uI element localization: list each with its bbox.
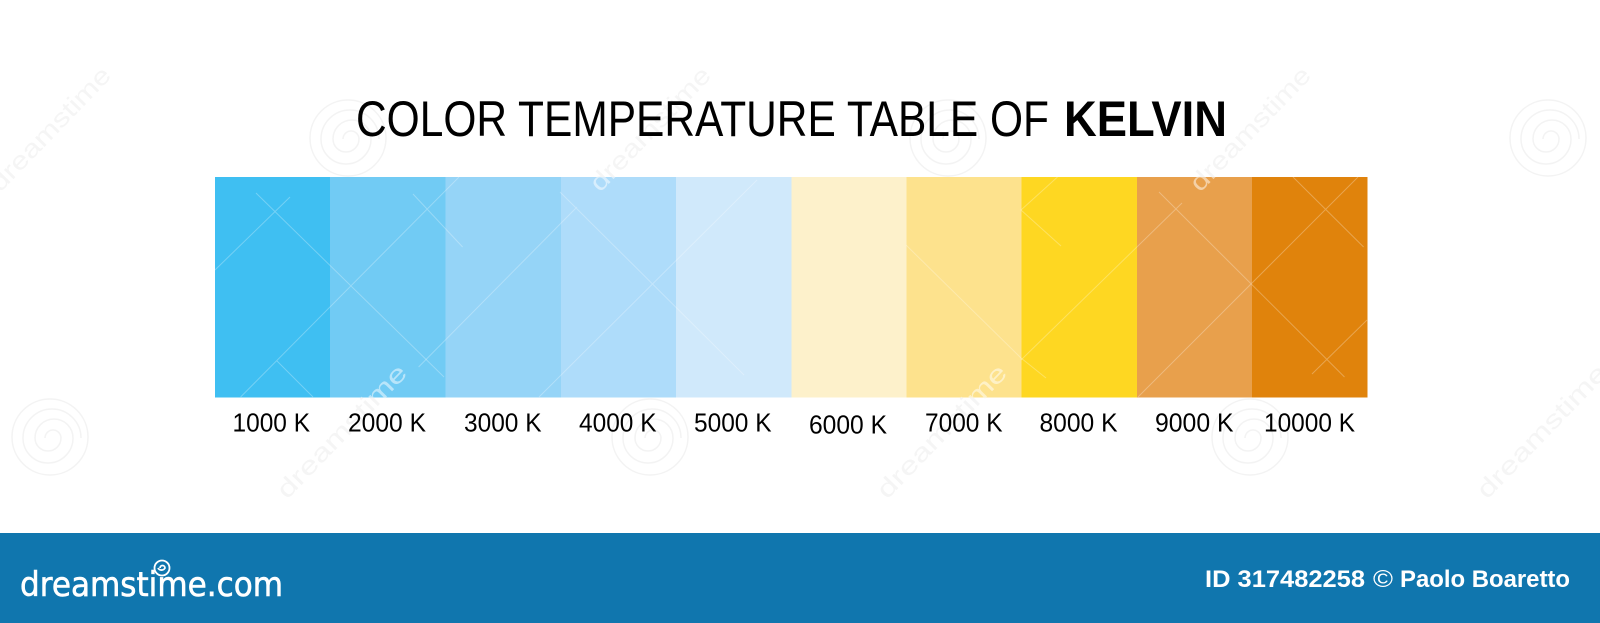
temperature labels: 3000 K: [464, 408, 542, 438]
image id and credit: [1205, 566, 1570, 593]
temperature labels: 10000 K: [1264, 408, 1356, 438]
title: KELVIN: [1064, 91, 1227, 147]
watermark overlay on bar: dreamstime: [871, 359, 1013, 504]
watermark overlay on bar: [215, 177, 1368, 398]
watermark: background spirals and diagonal text: dreamstime: [871, 359, 1013, 504]
swatch: 7000 K: [906, 177, 1022, 398]
temperature labels: 8000 K: [1040, 408, 1118, 438]
swatch: 9000 K: [1137, 177, 1252, 398]
temperature labels: 2000 K: [348, 408, 427, 438]
swatch: 10000 K: [1252, 177, 1368, 398]
temperature labels: 1000 K: [232, 408, 311, 438]
temperature labels: 9000 K: [1155, 408, 1234, 438]
footer band: [0, 533, 1600, 623]
color temperature bar: [215, 177, 1368, 398]
watermark overlay on bar: dreamstime: [584, 61, 717, 197]
swatch: 1000 K: [215, 177, 330, 398]
swatch: 5000 K: [676, 177, 792, 398]
temperature labels: [232, 408, 1356, 440]
watermark: background spirals and diagonal text: dreamstime: [1184, 61, 1317, 197]
watermark: background spirals and diagonal text: dreamstime: [1471, 359, 1600, 504]
swatch: 6000 K: [792, 177, 907, 398]
temperature labels: 6000 K: [809, 410, 888, 440]
watermark overlay on bar: dreamstime: [271, 359, 413, 504]
watermark: background spirals and diagonal text: [0, 61, 1600, 504]
image id and credit: Paolo Boaretto: [1400, 566, 1570, 593]
swatch: 4000 K: [561, 177, 676, 398]
logo text: dreamstime.com: [20, 565, 283, 605]
temperature labels: 4000 K: [579, 408, 657, 438]
image id and credit: ID 317482258: [1205, 566, 1365, 593]
swatch: 3000 K: [446, 177, 561, 398]
title: COLOR TEMPERATURE TABLE OF: [356, 91, 1049, 147]
swatch: 8000 K: [1022, 177, 1137, 398]
watermark: background spirals and diagonal text: dreamstime: [271, 359, 413, 504]
icon: spiral: [154, 560, 170, 576]
temperature labels: 5000 K: [694, 408, 772, 438]
temperature labels: 7000 K: [925, 408, 1003, 438]
image id and credit: ©: [1373, 566, 1393, 593]
watermark overlay on bar: dreamstime: [1184, 61, 1317, 197]
watermark: background spirals and diagonal text: dreamstime: [584, 61, 717, 197]
swatch: 2000 K: [330, 177, 446, 398]
